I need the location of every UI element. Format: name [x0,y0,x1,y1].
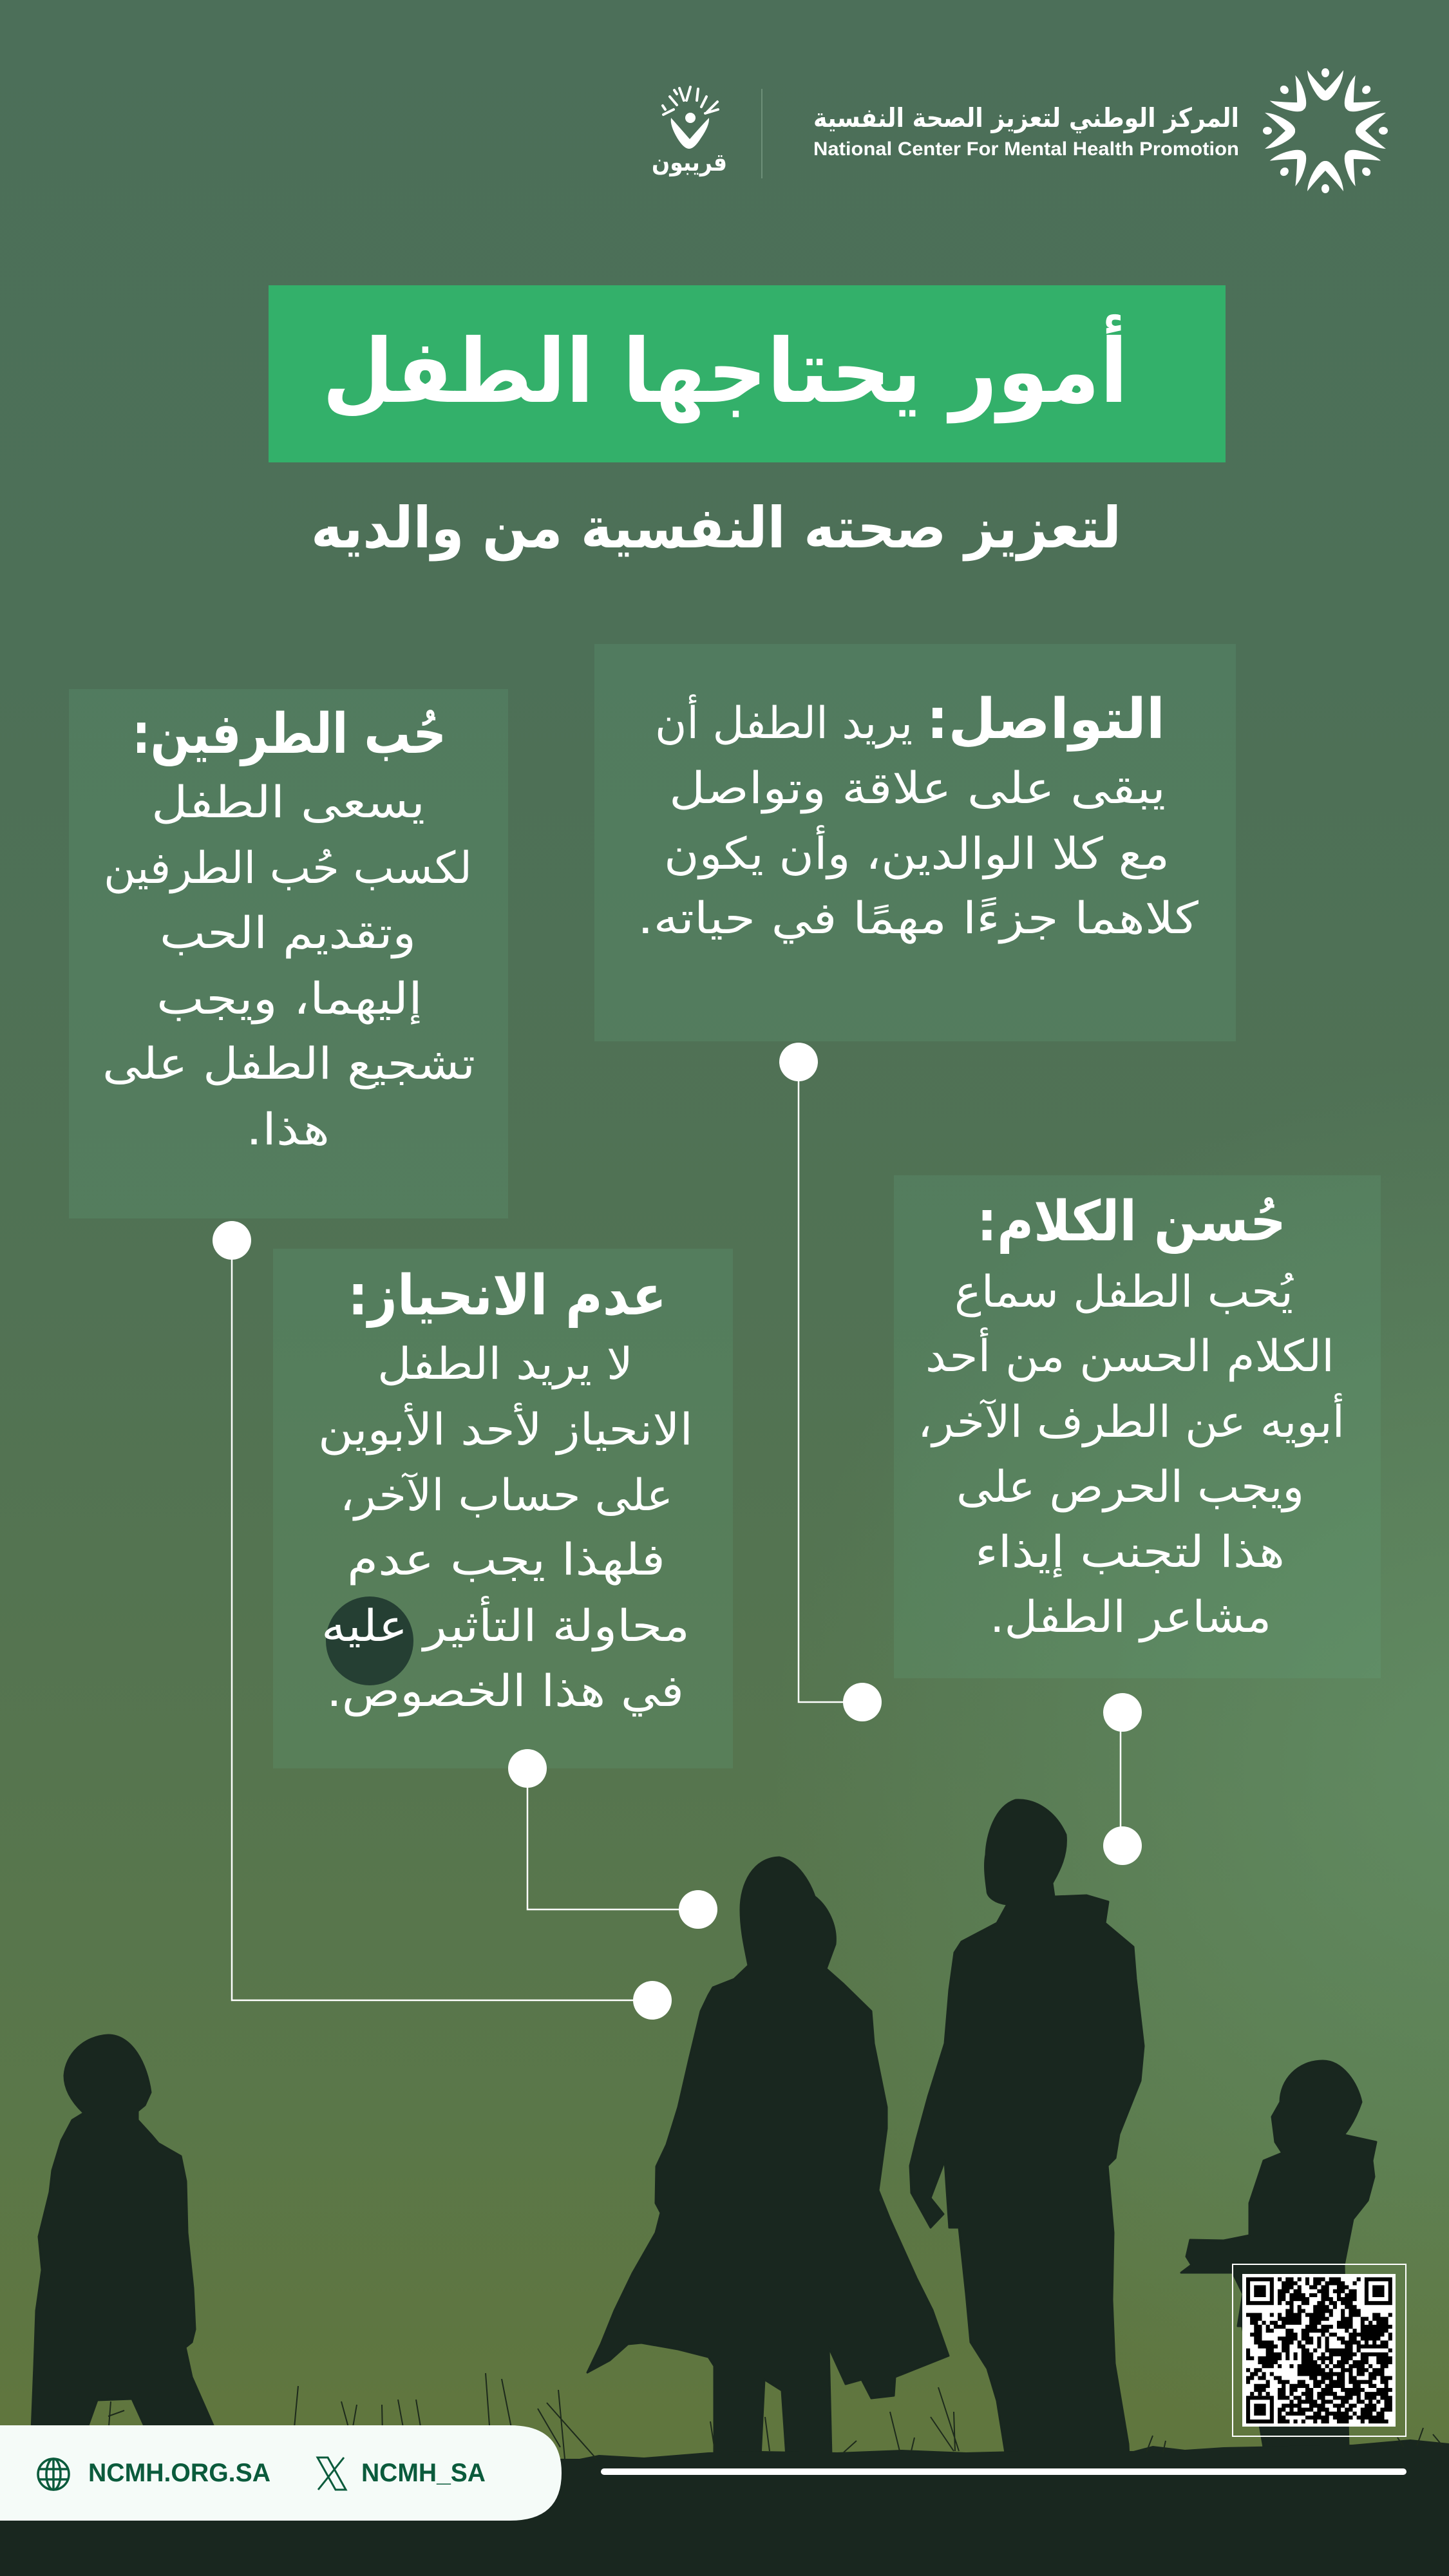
subtitle: لتعزيز صحته النفسية من والديه [311,495,1121,562]
panel: good speech: أبويه عن الطرف الآخر، [918,1393,1345,1448]
silhouette: woman in long coat [587,1857,949,2457]
logo: Qareeboon emblem [663,87,718,149]
panel: good speech: ويجب الحرص على [956,1462,1304,1513]
panel: love of both parents [69,689,508,1218]
title text: أمور يحتاجها الطفل [322,314,1128,424]
panel: communication: مع كلا الوالدين، وأن يكون [664,825,1170,880]
connector: good speech [1103,1693,1142,1865]
silhouette: small child on the right [1181,2061,1376,2447]
panel: communication: يبقى على علاقة وتواصل [669,763,1166,814]
dark circle behind text [326,1596,413,1685]
organisation name in Arabic: المركز الوطني لتعزيز الصحة النفسية [813,102,1239,133]
contact pill [0,2425,562,2521]
panel: good speech [894,1175,1381,1678]
connector: love of both parents to woman [213,1221,672,2020]
website address: NCMH.ORG.SA [88,2459,270,2487]
panel: communication [594,644,1236,1041]
panel: no taking sides: الانحياز لأحد الأبوين [318,1403,693,1455]
panel: love of both parents: تشجيع الطفل على [102,1039,475,1090]
ground and grass [0,2373,1449,2576]
icon: X logo [317,2458,346,2490]
panel: love of both parents: يسعى الطفل [151,777,425,828]
panel: love of both parents: إليهما، ويجب [156,974,422,1025]
social handle: NCMH_SA [361,2459,486,2487]
panel: good speech: هذا لتجنب إيذاء [975,1527,1285,1578]
panel: no taking sides: محاولة التأثير عليه [321,1596,690,1652]
panel: love of both parents: حُب الطرفين: [132,702,446,766]
silhouette: man in hooded jacket [910,1800,1144,2457]
silhouette: child on the left [31,2035,222,2447]
title banner [269,285,1226,462]
organisation name in English: National Center For Mental Health Promotion [813,138,1239,160]
connector: communication to man [779,1043,882,1721]
panel: love of both parents: لكسب حُب الطرفين [104,843,472,894]
logo: National Center for Mental Health Promotion emblem [1263,68,1388,193]
panel: no taking sides: لا يريد الطفل [377,1339,633,1390]
panel: no taking sides [273,1249,733,1768]
panel: no taking sides: فلهذا يجب عدم [347,1535,665,1586]
progress line under figures [601,2468,1406,2475]
panel: good speech: مشاعر الطفل. [990,1592,1271,1643]
panel: love of both parents: هذا. [246,1104,330,1155]
QR code frame [1233,2264,1406,2436]
icon: globe [38,2459,69,2490]
logo wordmark: قريبون [652,148,727,176]
connector: no taking sides [508,1749,717,1929]
panel: good speech: يُحب الطفل سماع [954,1267,1294,1318]
panel: communication: كلاهما جزءًا مهمًا في حياته. [638,893,1199,944]
panel: communication: التواصل: يريد الطفل أن [655,687,1165,752]
panel: no taking sides: عدم الانحياز: [348,1264,667,1328]
panel: no taking sides: في هذا الخصوص. [327,1666,684,1717]
panel: good speech: الكلام الحسن من أحد [925,1327,1334,1382]
panel: good speech: حُسن الكلام: [977,1189,1286,1254]
panel: no taking sides: على حساب الآخر، [340,1470,673,1521]
divider between logos [761,89,762,178]
panel: love of both parents: وتقديم الحب [160,908,416,959]
QR code modules [1246,2277,1392,2423]
